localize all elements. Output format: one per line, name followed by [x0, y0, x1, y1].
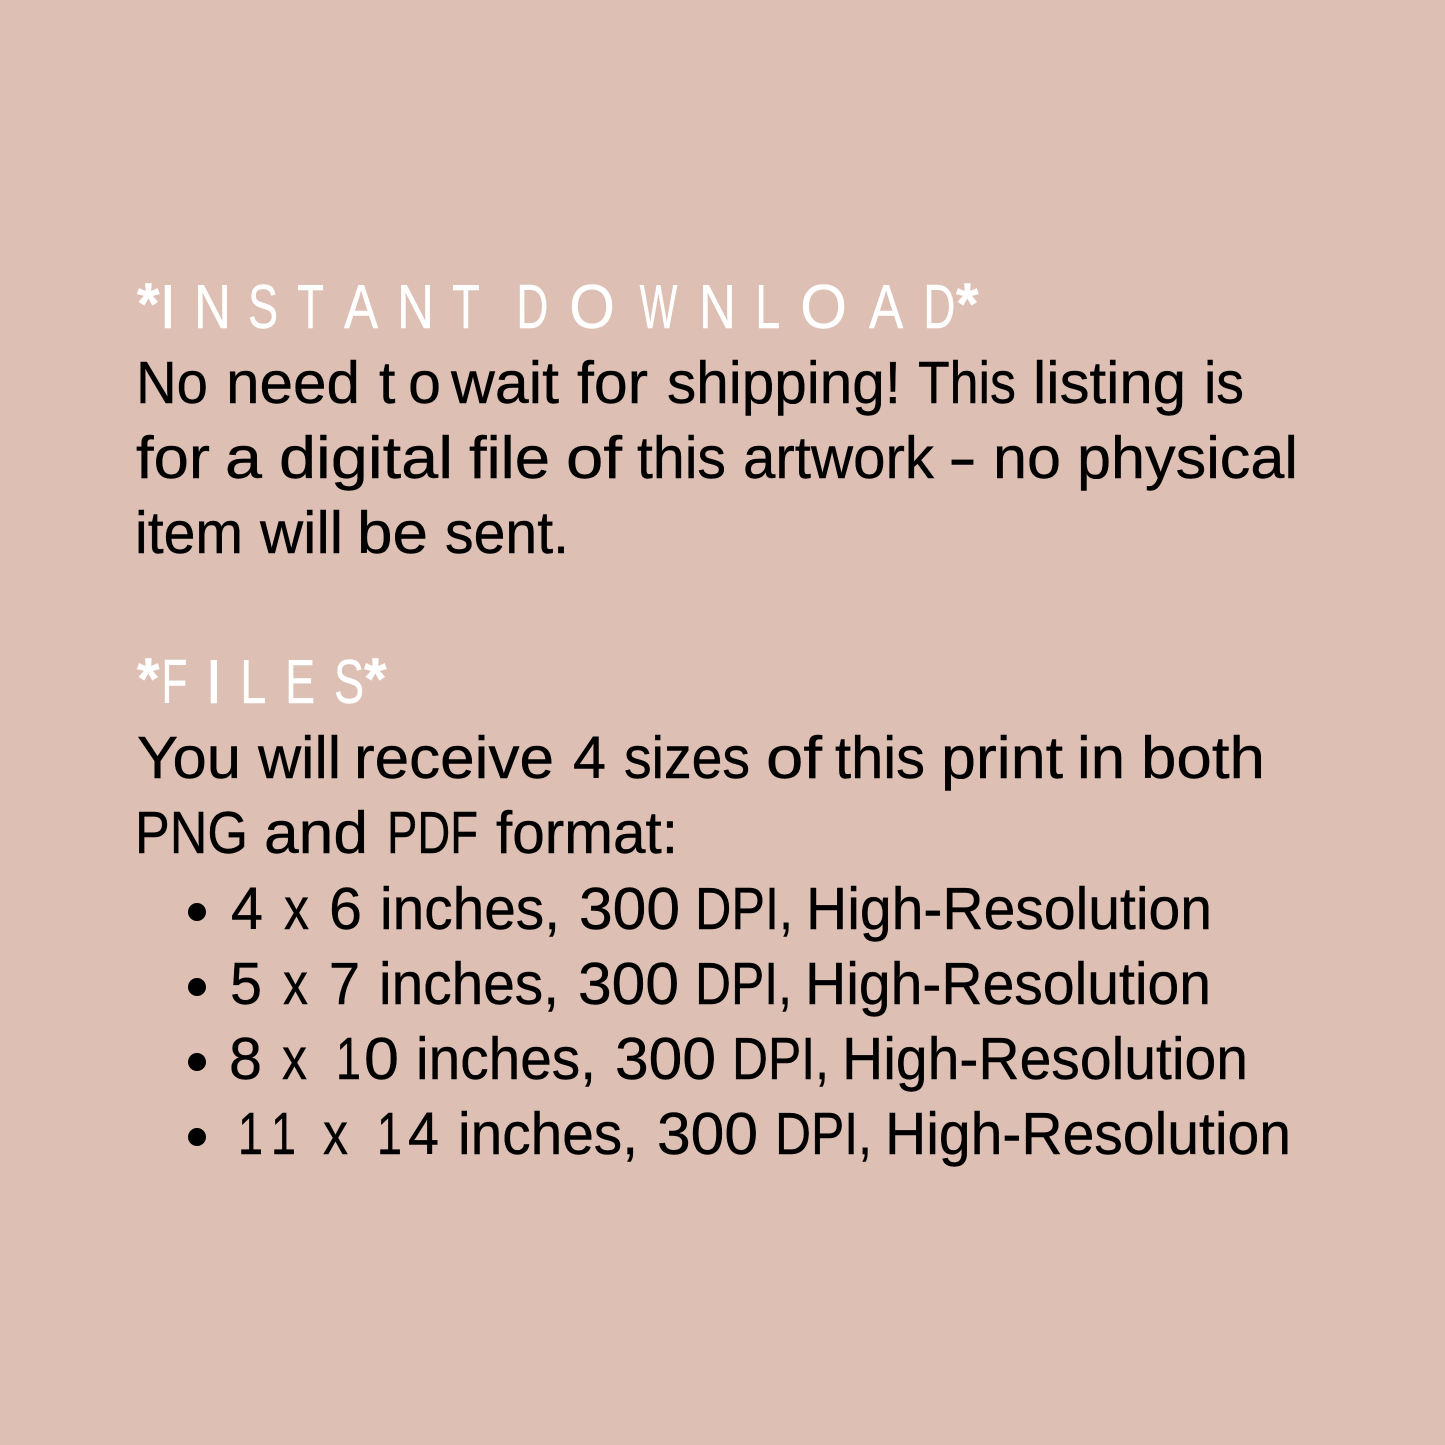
list item: 5 x 7: 5 — [230, 951, 262, 1017]
list item: 4 x 6: 300 — [579, 876, 680, 942]
heading: files: L — [240, 648, 266, 717]
list item: 5 x 7: inches, — [379, 951, 559, 1017]
heading: instant download: D — [516, 273, 548, 342]
list item: 4 x 6: DPI, — [695, 876, 793, 942]
heading: instant download: N — [699, 273, 736, 342]
list item: 5 x 7: 7 — [329, 951, 360, 1017]
text block: instant download description: be — [357, 500, 428, 566]
heading: files: S — [334, 648, 364, 717]
text block: instant download description: no — [993, 425, 1061, 491]
text block: instant download description: - — [948, 425, 977, 491]
list item: 4 x 6: 4 — [231, 876, 263, 942]
text block: instant download description: item — [135, 500, 243, 566]
text block: instant download description: listing — [1033, 350, 1186, 416]
text block: instant download description: wait — [450, 350, 559, 416]
text block: instant download description: digital — [279, 425, 453, 491]
heading: instant download: L — [755, 273, 780, 342]
list item: 11 x 14: High-Resolution — [885, 1101, 1291, 1167]
text block: instant download description — [135, 350, 1298, 566]
list item: 5 x 7: x — [283, 951, 308, 1017]
heading: instant download: * — [956, 272, 979, 337]
list item: 11 x 14 — [188, 1101, 1291, 1167]
list item: 8 x 10: DPI, — [732, 1026, 829, 1092]
heading: instant download: A — [869, 273, 904, 342]
text block: files description: PNG — [135, 800, 248, 866]
list item: 5 x 7 — [188, 951, 1211, 1017]
text block: instant download description: is — [1204, 350, 1244, 416]
heading: instant download: N — [194, 273, 231, 342]
list item: 8 x 10: 0 — [364, 1026, 399, 1092]
text block: files description: format: — [496, 800, 678, 866]
text block: files description: receive — [354, 725, 554, 791]
list item: 11 x 14: x — [323, 1101, 348, 1167]
heading: instant download: I — [159, 273, 176, 342]
heading: instant download: S — [248, 273, 278, 342]
list item: 5 x 7: DPI, — [695, 951, 792, 1017]
list item: 5 x 7: High-Resolution — [805, 951, 1211, 1017]
list item: 4 x 6: High-Resolution — [806, 876, 1212, 942]
heading: instant download: A — [344, 273, 379, 342]
list item: 11 x 14: 300 — [657, 1101, 758, 1167]
text block: instant download description: artwork — [743, 425, 934, 491]
text block: instant download description: for — [577, 350, 648, 416]
text block: instant download description: of — [566, 425, 623, 491]
text block: instant download description: physical — [1077, 425, 1298, 491]
list item: 11 x 14: 1 — [377, 1101, 402, 1167]
text block: files description: sizes — [624, 725, 750, 791]
heading: files: F — [162, 648, 187, 717]
list: print sizes — [188, 876, 1291, 1167]
text block: instant download description: will — [259, 500, 343, 566]
heading: files: I — [205, 648, 222, 717]
text block: instant download description: need — [226, 350, 360, 416]
text block: instant download description: a — [225, 425, 262, 491]
list item: 8 x 10: 8 — [229, 1026, 262, 1092]
text block: files description: both — [1141, 725, 1265, 791]
list item: 8 x 10: inches, — [416, 1026, 596, 1092]
text block: files description: PDF — [387, 800, 478, 866]
text block: files description: will — [257, 725, 341, 791]
list item: 11 x 14: 1 — [271, 1101, 296, 1167]
list item: 11 x 14: DPI, — [775, 1101, 872, 1167]
text block: instant download description: sent. — [445, 500, 569, 566]
list item: 11 x 14: inches, — [458, 1101, 638, 1167]
list item: 5 x 7: 300 — [578, 951, 679, 1017]
text block: files description — [135, 725, 1265, 866]
list item: 4 x 6: x — [284, 876, 309, 942]
heading: files: * — [137, 647, 160, 712]
heading: instant download: * — [137, 272, 160, 337]
list item: 8 x 10: 1 — [336, 1026, 361, 1092]
list item: 4 x 6: inches, — [380, 876, 560, 942]
heading: instant download: O — [800, 273, 847, 342]
list item: 4 x 6 — [188, 876, 1212, 942]
text block: files description: this — [835, 725, 925, 791]
text block: instant download description: No — [136, 350, 208, 416]
heading: instant download: D — [923, 273, 955, 342]
heading: instant download: N — [397, 273, 434, 342]
section: instant download — [135, 272, 1298, 566]
section: files — [135, 647, 1291, 1167]
list item: 8 x 10 — [188, 1026, 1248, 1092]
heading: files: * — [364, 647, 387, 712]
text block: instant download description: to — [379, 350, 441, 416]
list item: 4 x 6: 6 — [329, 876, 362, 942]
list item: 11 x 14: 1 — [238, 1101, 263, 1167]
heading: instant download: O — [569, 273, 615, 342]
text block: files description: and — [264, 800, 368, 866]
list item: 8 x 10: x — [282, 1026, 307, 1092]
text block: instant download description: this — [637, 425, 726, 491]
heading: files: E — [285, 648, 315, 717]
list item: 8 x 10: 300 — [615, 1026, 716, 1092]
text block: instant download description: This — [918, 350, 1016, 416]
text block: files description: print — [941, 725, 1063, 791]
heading: instant download: T — [452, 273, 479, 342]
heading: instant download: W — [640, 273, 678, 342]
text block: files description: of — [766, 725, 823, 791]
list item: 8 x 10: High-Resolution — [842, 1026, 1248, 1092]
list item: 11 x 14: 4 — [408, 1101, 439, 1167]
text block: files description: 4 — [573, 725, 606, 791]
heading: instant download: T — [297, 273, 324, 342]
text block: instant download description: for — [136, 425, 210, 491]
text block: instant download description: file — [469, 425, 550, 491]
text block: instant download description: shipping! — [667, 350, 901, 416]
text block: files description: in — [1077, 725, 1125, 791]
text block: files description: You — [137, 725, 241, 791]
